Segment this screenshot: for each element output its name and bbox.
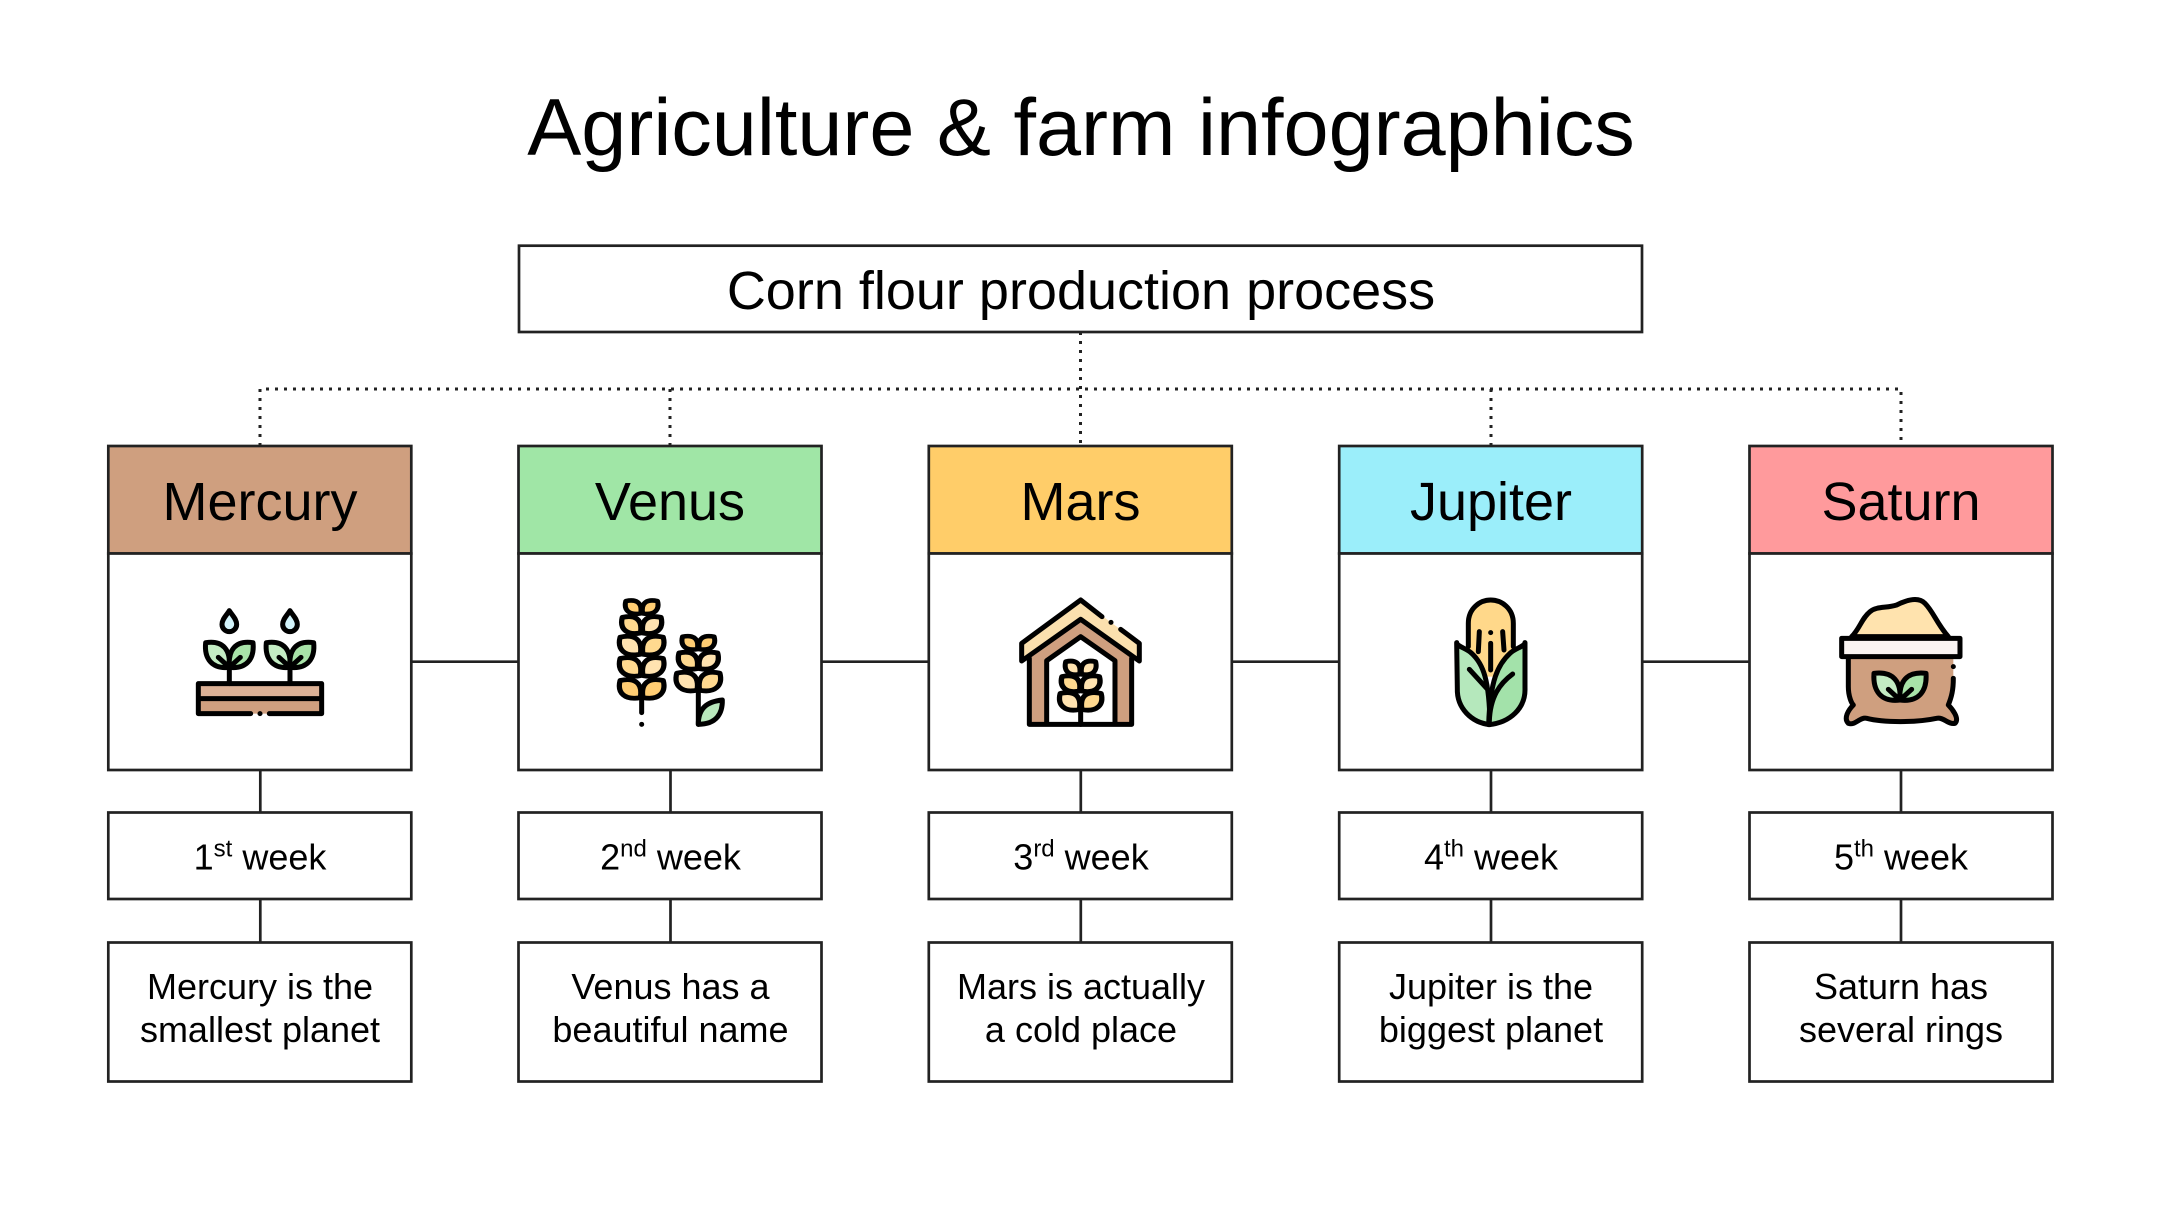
- week box: [518, 812, 822, 899]
- icon panel: [1750, 554, 2052, 770]
- week box: 2: [600, 836, 620, 878]
- process heading box: Corn flour production process: [727, 261, 1435, 321]
- column: Mercury: [108, 446, 411, 1082]
- dotted connectors: [260, 332, 1901, 446]
- title: Agriculture & farm infographics: [527, 83, 1635, 173]
- week box: 3: [1013, 836, 1033, 878]
- icon: flour sack: [1842, 600, 1960, 724]
- week box: th: [1444, 836, 1464, 862]
- week box: nd: [620, 836, 647, 862]
- header: Venus: [518, 446, 822, 554]
- description box: biggest planet: [1379, 1009, 1603, 1050]
- connector lines: [1900, 770, 1902, 942]
- description box: a cold place: [985, 1009, 1177, 1050]
- week box: week: [1464, 836, 1559, 878]
- description box: Mercury is the: [147, 966, 373, 1007]
- header: Mars: Mars: [1020, 472, 1140, 532]
- icon panel: [108, 554, 411, 770]
- header: Saturn: [1750, 446, 2052, 554]
- header: Mercury: Mercury: [162, 472, 358, 532]
- column: Saturn: [1750, 446, 2052, 1082]
- week box: 1: [194, 836, 214, 878]
- description box: Saturn has: [1814, 966, 1988, 1007]
- week box: 4: [1424, 836, 1444, 878]
- description box: [1750, 942, 2052, 1082]
- icon: seedlings with water drops: [198, 611, 322, 714]
- description box: [929, 942, 1232, 1082]
- description box: smallest planet: [140, 1009, 380, 1050]
- description box: beautiful name: [552, 1009, 789, 1050]
- description box: Mars is actually: [957, 966, 1205, 1007]
- description box: [1339, 942, 1642, 1082]
- process heading box: [519, 246, 1642, 332]
- column: Jupiter: [1339, 446, 1642, 1082]
- description box: [518, 942, 822, 1082]
- icon: wheat stalks: [619, 600, 722, 724]
- icon panel: [518, 554, 822, 770]
- week box: th: [1854, 836, 1874, 862]
- description box: several rings: [1799, 1009, 2003, 1050]
- horizontal connectors: [411, 660, 1749, 663]
- icon panel: [929, 554, 1232, 770]
- header: Saturn: Saturn: [1821, 472, 1981, 532]
- week box: [929, 812, 1232, 899]
- connector lines: [1079, 770, 1082, 942]
- icon: corn cob: [1457, 600, 1525, 725]
- column: Mars: [929, 446, 1232, 1082]
- connector lines: [259, 770, 262, 942]
- week box: [1339, 812, 1642, 899]
- icon: barn with wheat: [1022, 600, 1139, 724]
- week box: [108, 812, 411, 899]
- week box: week: [1055, 836, 1150, 878]
- week box: week: [647, 836, 742, 878]
- connector lines: [1490, 770, 1492, 942]
- week box: [1750, 812, 2052, 899]
- connector lines: [669, 770, 672, 942]
- header: Venus: Venus: [595, 472, 745, 532]
- header: Jupiter: Jupiter: [1410, 472, 1572, 532]
- week box: rd: [1033, 836, 1055, 862]
- week box: week: [232, 836, 327, 878]
- column: Venus: [518, 446, 822, 1082]
- description box: Venus has a: [571, 966, 771, 1007]
- week box: 5: [1834, 836, 1854, 878]
- description box: Jupiter is the: [1389, 966, 1593, 1007]
- header: Mercury: [108, 446, 411, 554]
- description box: [108, 942, 411, 1082]
- week box: week: [1874, 836, 1969, 878]
- header: Mars: [929, 446, 1232, 554]
- week box: st: [214, 836, 233, 862]
- header: Jupiter: [1339, 446, 1642, 554]
- icon panel: [1339, 554, 1642, 770]
